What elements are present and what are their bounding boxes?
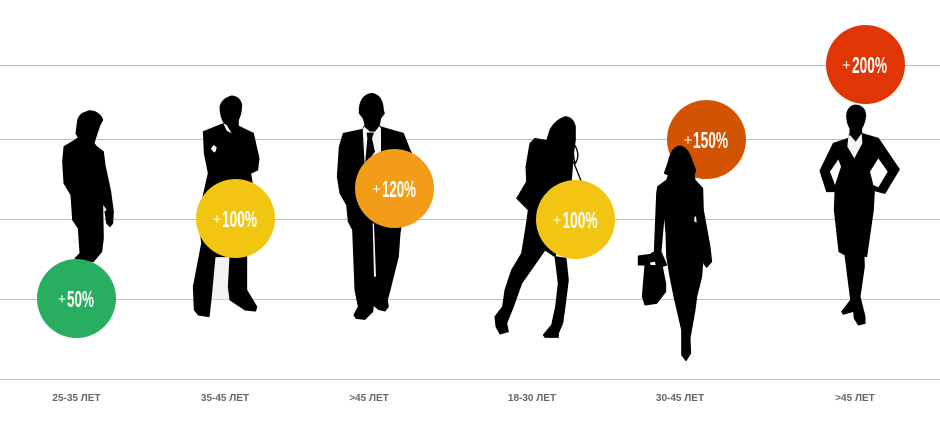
badge: +120%: 120% — [382, 176, 416, 202]
badge: +120% — [355, 149, 434, 228]
badge: +150%: + — [684, 132, 693, 149]
age labels — [52, 393, 875, 404]
badge: +50%: 50% — [67, 286, 94, 312]
badge: +100% (35-45): + — [213, 211, 222, 228]
age labels: >45 ЛЕТ — [835, 393, 875, 404]
badge: +150%: 150% — [693, 127, 728, 153]
badge: +200% — [826, 25, 905, 104]
age labels: >45 ЛЕТ — [349, 393, 389, 404]
age labels: 25-35 ЛЕТ — [52, 393, 101, 404]
silhouette: man with folded arms — [193, 96, 259, 317]
badge: +100% (18-30): + — [553, 212, 562, 229]
age labels: 35-45 ЛЕТ — [201, 393, 249, 404]
badge: +200%: 200% — [852, 52, 887, 78]
age labels: 30-45 ЛЕТ — [656, 393, 704, 404]
badge: +100% (35-45) — [196, 179, 275, 258]
badge: +50%: + — [58, 291, 67, 308]
badge: +200%: + — [842, 57, 851, 74]
badge: +150% — [667, 100, 746, 179]
age labels: 18-30 ЛЕТ — [508, 393, 556, 404]
badge: +120%: + — [372, 181, 381, 198]
badge: +50% — [37, 259, 116, 338]
badge: +100% (35-45): 100% — [222, 206, 257, 232]
silhouette: woman in skirt suit — [820, 105, 899, 325]
badge: +100% (18-30) — [536, 180, 615, 259]
badge: +100% (18-30): 100% — [562, 207, 598, 233]
silhouette: man in suit and tie — [337, 93, 413, 319]
silhouette: woman with long hair — [495, 117, 581, 337]
silhouette: young man — [63, 111, 113, 262]
silhouette: woman with handbag — [638, 146, 712, 361]
